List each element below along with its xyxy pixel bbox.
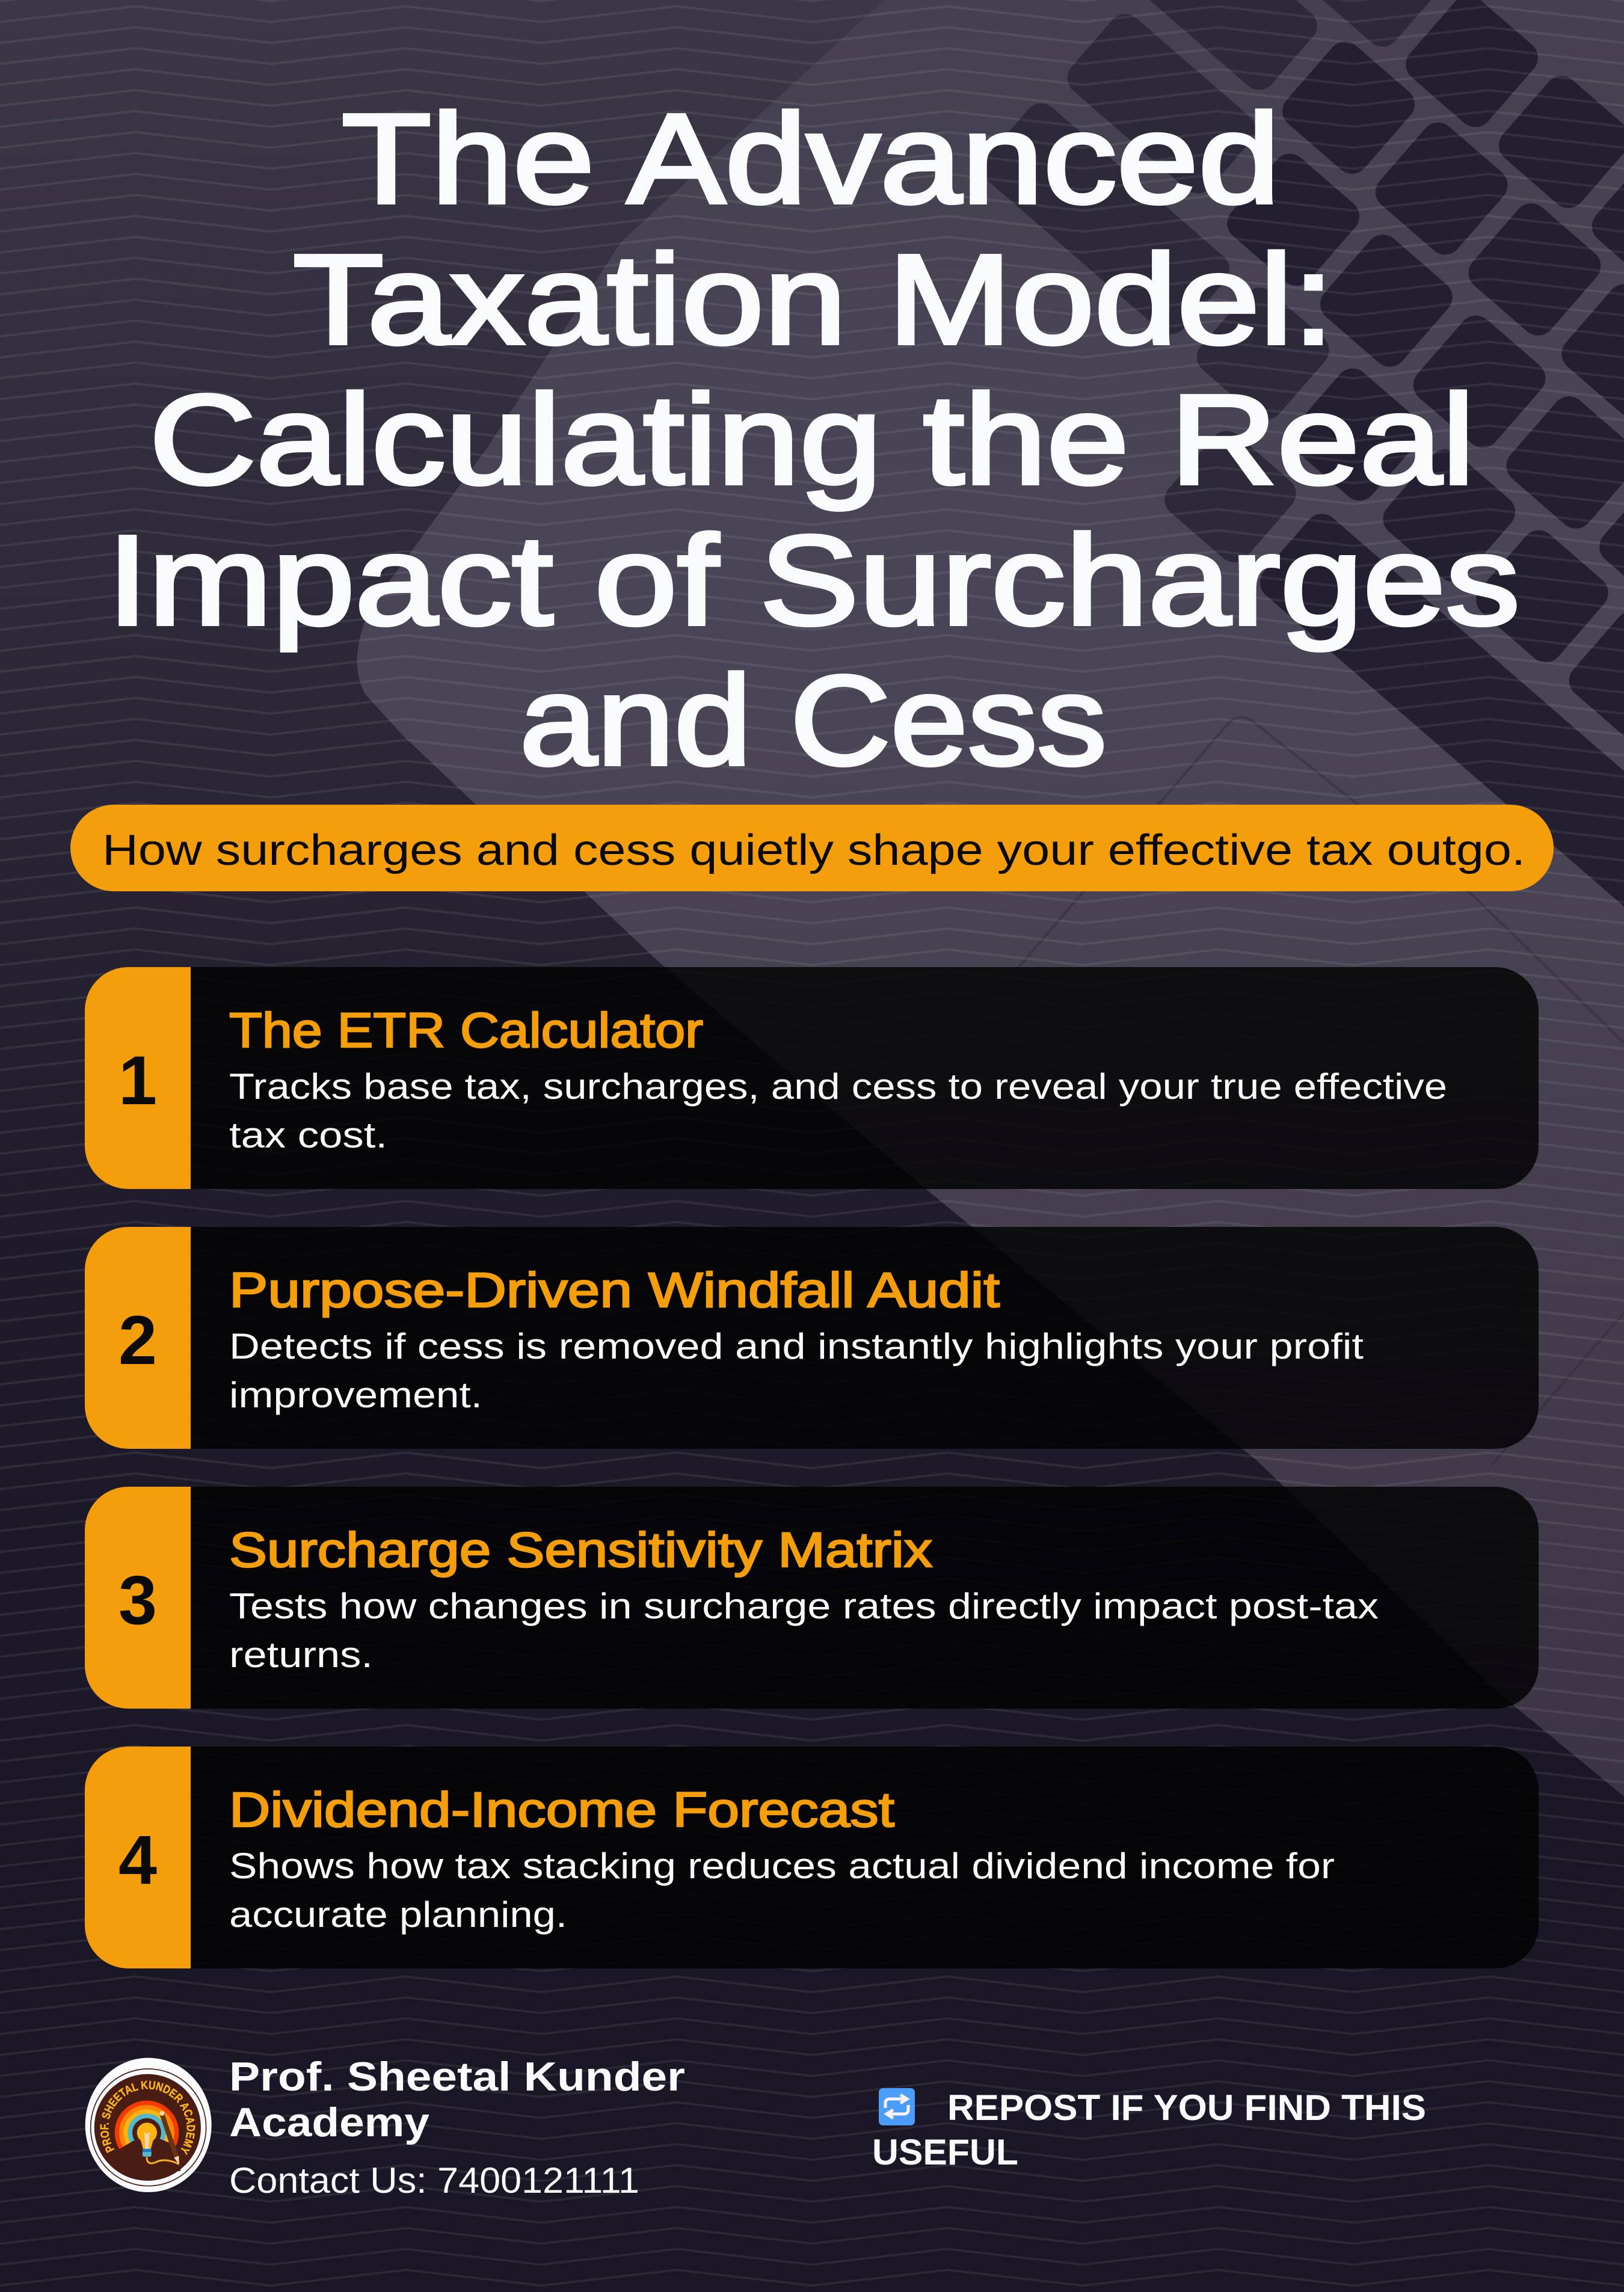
title: Taxation Model: (293, 228, 1334, 370)
number badge 1 (85, 967, 191, 1189)
number badge 2: 2 (118, 1302, 157, 1379)
number badge 2 (85, 1227, 191, 1449)
laptop palm rest (357, 0, 1624, 1796)
description 2: improvement. (229, 1375, 482, 1415)
footer: repost call to action (872, 2088, 1426, 2172)
heading: Purpose-Driven Windfall Audit: Purpose-Driven Windfall Audit (229, 1263, 1000, 1318)
title: Impact of Surcharges (107, 509, 1520, 651)
title: Calculating the Real (149, 368, 1475, 511)
title: and Cess (520, 649, 1107, 791)
subtitle pill (70, 805, 1554, 891)
icon: academy logo (85, 2058, 212, 2192)
number badge 3 (85, 1487, 191, 1709)
number badge 4: 4 (118, 1822, 157, 1899)
description 1 (229, 1066, 1447, 1155)
laptop keyboard keys (844, 0, 1624, 959)
description 3 (229, 1586, 1379, 1675)
footer: contact: Contact Us: 7400121111 (229, 2160, 639, 2201)
description 4: accurate planning. (229, 1894, 567, 1935)
description 3: returns. (229, 1635, 373, 1675)
subtitle pill: How surcharges and cess quietly shape your effective tax outgo. (102, 826, 1525, 874)
icon: repost (879, 2088, 915, 2125)
description 1: Tracks base tax, surcharges, and cess to reveal your true effective (229, 1066, 1447, 1107)
footer: academy name (229, 2054, 685, 2145)
number badge 3: 3 (118, 1562, 157, 1639)
description 4 (229, 1846, 1335, 1935)
footer: academy name: Prof. Sheetal Kunder (229, 2054, 685, 2100)
title: The Advanced (342, 87, 1280, 230)
number badge 4 (85, 1747, 191, 1968)
heading: Surcharge Sensitivity Matrix: Surcharge Sensitivity Matrix (229, 1523, 932, 1578)
panel: card 3 (85, 1487, 1539, 1709)
icon: academy logo: PROF. SHEETAL KUNDER ACADEMY (100, 2081, 195, 2155)
description 4: Shows how tax stacking reduces actual dividend income for (229, 1846, 1335, 1886)
footer: academy name: Academy (229, 2100, 429, 2145)
heading: Dividend-Income Forecast: Dividend-Income Forecast (229, 1783, 894, 1837)
panel: card 1 (85, 967, 1539, 1189)
footer: repost call to action: USEFUL (872, 2132, 1018, 2172)
footer: repost call to action: REPOST IF YOU FIND THIS (947, 2088, 1426, 2128)
number badge 1: 1 (118, 1042, 157, 1119)
description 3: Tests how changes in surcharge rates directly impact post-tax (229, 1586, 1379, 1626)
title (107, 87, 1520, 791)
panel: card 2 (85, 1227, 1539, 1449)
heading: The ETR Calculator: The ETR Calculator (229, 1003, 703, 1058)
description 2: Detects if cess is removed and instantly highlights your profit (229, 1326, 1364, 1366)
description 1: tax cost. (229, 1115, 387, 1155)
laptop trackpad outline (1017, 717, 1624, 1465)
panel: card 4 (85, 1747, 1539, 1968)
description 2 (229, 1326, 1364, 1415)
